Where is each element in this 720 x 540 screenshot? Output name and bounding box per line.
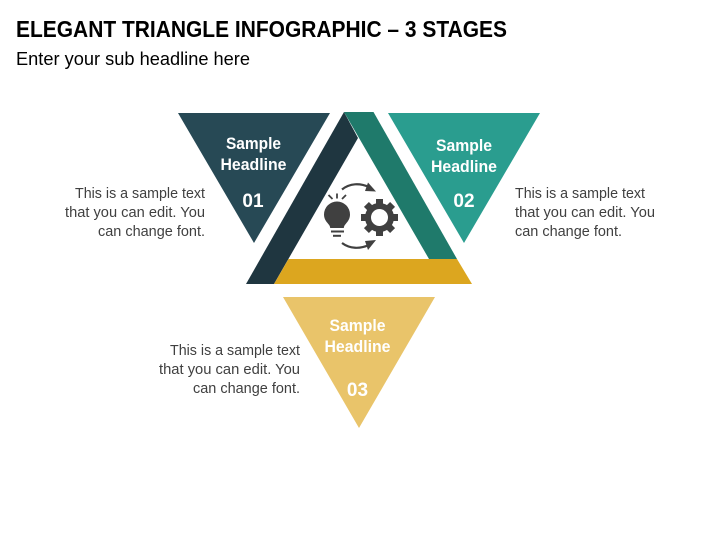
- text block: stage 01: that you can edit. You: [65, 205, 205, 221]
- panel: stage 01: [178, 113, 330, 243]
- text block: stage 01: can change font.: [98, 224, 205, 240]
- panel: stage 02: [388, 113, 540, 243]
- title: ELEGANT TRIANGLE INFOGRAPHIC – 3 STAGES: [16, 16, 507, 42]
- triangle 02: [388, 113, 540, 243]
- triangle 03: [283, 297, 435, 428]
- headline 02: Headline: [431, 158, 497, 176]
- icon: gear: [361, 199, 398, 236]
- number 03: 03: [347, 380, 368, 401]
- central triangle: [246, 112, 472, 284]
- text block: stage 02: can change font.: [515, 224, 622, 240]
- text block: stage 03: can change font.: [193, 381, 300, 397]
- headline 03: Headline: [324, 338, 390, 356]
- arrow: bottom curved: [342, 240, 376, 250]
- text block: stage 03: that you can edit. You: [159, 362, 300, 378]
- icon: light bulb: [324, 194, 350, 237]
- text block: stage 03: This is a sample text: [170, 343, 300, 359]
- text block: stage 02: This is a sample text: [515, 186, 645, 202]
- headline 01: Sample: [226, 135, 281, 153]
- triangle 01: [178, 113, 330, 243]
- subtitle: Enter your sub headline here: [16, 49, 250, 69]
- number 01: 01: [242, 191, 264, 212]
- text block: stage 02: that you can edit. You: [515, 205, 655, 221]
- number 02: 02: [453, 191, 475, 212]
- headline 03: Sample: [330, 317, 386, 335]
- text block: stage 01: This is a sample text: [75, 186, 205, 202]
- dark left band: [246, 112, 358, 284]
- arrow: top curved: [342, 182, 376, 192]
- icon: light bulb and gear cycle: [324, 182, 398, 250]
- headline 02: Sample: [436, 137, 492, 155]
- panel: stage 03: [283, 297, 435, 428]
- headline 01: Headline: [220, 156, 286, 174]
- green right band: [344, 112, 457, 259]
- gold bottom band: [274, 259, 472, 284]
